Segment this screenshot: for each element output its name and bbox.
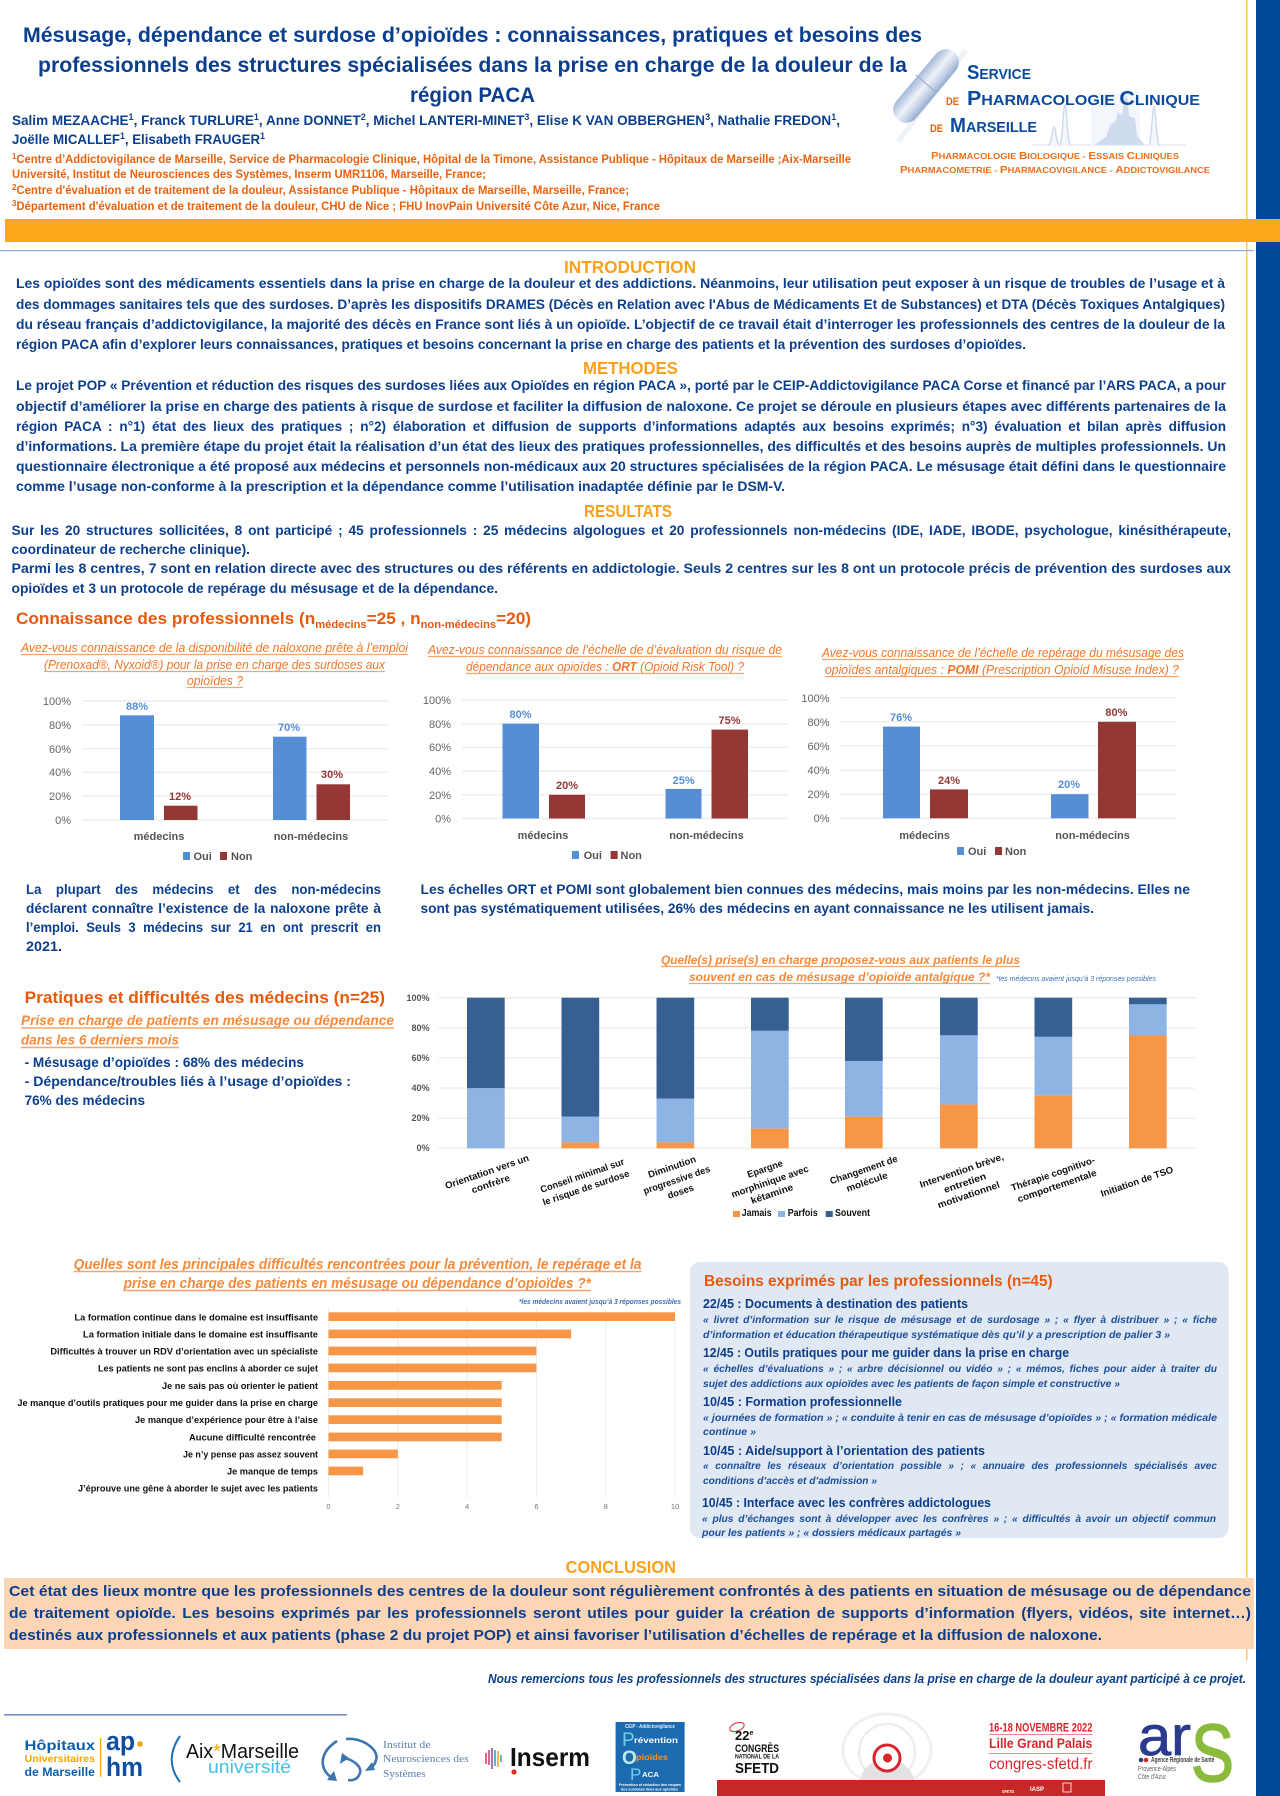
affiliations: Centre d'évaluation et de traitement de la douleur, Assistance Publique - Hôpitaux de Marseille, Marseille, France; xyxy=(16,185,629,197)
logo: projet POP: pioïdes xyxy=(636,1752,668,1762)
chart: POMI knowledge xyxy=(801,646,1184,858)
category labels: Conseil minimal sur xyxy=(539,1157,626,1196)
logo: AP-HM: Hôpitaux xyxy=(24,1738,96,1753)
authors: , Anne DONNET xyxy=(259,113,361,128)
category labels xyxy=(444,1152,1175,1211)
section: introduction: des dommages sanitaires tels que des surdoses. D’après les dispositifs DRAMES (Décès en Relation avec l'Abus de Médicaments Et de Substances) et DTA (Décès Toxiques Antalgiques) xyxy=(16,297,1225,312)
authors: , Franck TURLURE xyxy=(134,113,254,128)
chart: ORT knowledge: 20% xyxy=(429,790,451,802)
category labels: doses xyxy=(666,1183,695,1202)
acknowledgement: Nous remercions tous les professionnels des structures spécialisées dans la prise en charge de la douleur ayant participé à ce projet. xyxy=(488,1672,1246,1686)
logo: Aix-Marseille Universite: université xyxy=(208,1757,291,1777)
category labels: Intervention brève, xyxy=(918,1152,1005,1191)
question 3: Avez-vous connaissance de l’échelle de repérage du mésusage des xyxy=(821,646,1184,660)
authors: 1 xyxy=(129,112,134,122)
category labels: Thérapie cognitivo- xyxy=(1010,1155,1097,1194)
heading: connaissance des professionnels: =20) xyxy=(496,609,531,628)
logo: service de pharmacologie clinique: DE xyxy=(930,123,943,135)
chart: POMI knowledge: non-médecins xyxy=(1055,830,1130,842)
logo: ARS: Provence-Alpes xyxy=(1138,1766,1176,1773)
section: methodes: objectif d’améliorer la prise en charge des patients à risque de surdose et faciliter la diffusion de naloxone. Ce projet se déroule en plusieurs étapes avec différents partenaires de la xyxy=(16,399,1227,414)
logo: Institut de Neurosciences des Systemes xyxy=(323,1739,469,1781)
chart: prises en charge stacked bars: 20% xyxy=(411,1113,430,1123)
chart: naloxone knowledge: 12% xyxy=(169,791,191,803)
authors: Salim MEZAACHE xyxy=(12,113,128,128)
logo: projet POP: des surdoses liées aux opioïdes xyxy=(621,1786,679,1792)
legend: Jamais xyxy=(742,1208,772,1219)
chart: difficultes rencontrees: 10 xyxy=(671,1502,679,1511)
logo: projet POP: CEIP - Addictovigilance xyxy=(625,1724,675,1730)
chart: ORT knowledge: 20% xyxy=(556,780,578,792)
chart: naloxone knowledge: 20% xyxy=(49,791,71,803)
chart: prises en charge stacked bars: 40% xyxy=(411,1083,430,1093)
category labels: morphinique avec xyxy=(730,1164,810,1201)
need: outils: 12/45 : Outils pratiques pour me guider dans la prise en charge xyxy=(703,1346,1069,1360)
question 2: Avez-vous connaissance de l’échelle de d’évaluation du risque de xyxy=(427,643,782,657)
section: resultats: opioïdes et 3 un protocole de repérage du mésusage et de la dépendance. xyxy=(12,581,498,596)
chart: POMI knowledge: 20% xyxy=(1058,779,1080,791)
logo: congres SFETD: congres-sfetd.fr xyxy=(989,1756,1092,1773)
category labels: Diminution xyxy=(647,1154,698,1181)
category labels: molécule xyxy=(845,1170,889,1195)
chart: naloxone knowledge: 70% xyxy=(278,722,300,734)
need: orientation: 10/45 : Aide/support à l’orientation des patients xyxy=(703,1444,985,1458)
chart: naloxone knowledge: médecins xyxy=(134,831,184,843)
question 5: Quelles sont les principales difficultés rencontrées pour la prévention, le repérage et la xyxy=(74,1257,642,1273)
logo: congres SFETD: 16-18 NOVEMBRE 2022 xyxy=(989,1722,1092,1734)
section: introduction: Les opioïdes sont des médicaments essentiels dans la prise en charge de la douleur et des addictions. Néanmoins, leur utilisation peut exposer à un risque de troubles de l’usage et à xyxy=(16,276,1226,291)
category labels: Changement de xyxy=(829,1154,899,1187)
panel: besoins exprimes xyxy=(690,1262,1229,1539)
authors: 1 xyxy=(260,131,265,141)
authors: 3 xyxy=(705,112,710,122)
section: conclusion: destinés aux professionnels et aux patients (phase 2 du projet POP) et ainsi favoriser l’utilisation d’échelles de repérage et la diffusion de naloxone. xyxy=(9,1627,1102,1644)
question 2 xyxy=(427,643,782,674)
need: outils: sujet des addictions aux opioïdes avec les patients de façon simple et constructive » xyxy=(703,1378,1120,1390)
heading: connaissance des professionnels: non-médecins xyxy=(421,619,496,631)
title: Mésusage, dépendance et surdose d’opioïdes : connaissances, pratiques et besoins des xyxy=(23,23,922,47)
text block: naloxone comment xyxy=(26,882,381,954)
logo: congres SFETD: Lille Grand Palais xyxy=(989,1736,1092,1751)
logo: service de pharmacologie clinique: PHARMACOLOGIE CLINIQUE xyxy=(967,88,1200,110)
question 5 xyxy=(74,1257,642,1292)
question 1 xyxy=(20,641,409,688)
chart: naloxone knowledge: non-médecins xyxy=(274,831,348,843)
subheading: prise en charge: dans les 6 derniers mois xyxy=(21,1032,179,1048)
category labels: entretien xyxy=(943,1171,988,1196)
chart: naloxone knowledge: 60% xyxy=(49,744,71,756)
category labels: Je manque de temps xyxy=(227,1466,318,1478)
authors: 3 xyxy=(524,112,529,122)
affiliations: 2 xyxy=(12,183,17,192)
logo: projet POP: Prévention et réduction des risques xyxy=(619,1782,682,1787)
authors: 2 xyxy=(361,112,366,122)
logo: congres SFETD: 22 xyxy=(735,1728,749,1743)
chart: difficultes rencontrees: 4 xyxy=(465,1502,469,1511)
chart: naloxone knowledge: Non xyxy=(231,851,253,863)
section: conclusion xyxy=(4,1557,1254,1649)
need: outils: « échelles d’évaluations » ; « arbre décisionnel ou vidéo » ; « mémos, fiches pour aider à traiter du xyxy=(703,1363,1218,1375)
chart: prises en charge stacked bars: 60% xyxy=(411,1053,430,1063)
section: conclusion: CONCLUSION xyxy=(566,1557,676,1577)
need: interface: « plus d’échanges sont à développer avec les confrères » ; « difficultés à avoir un objectif commun xyxy=(702,1513,1216,1525)
chart: naloxone knowledge: 88% xyxy=(126,701,148,713)
logo: service de pharmacologie clinique: MARSEILLE xyxy=(950,115,1037,137)
question 1: Avez-vous connaissance de la disponibilité de naloxone prête à l’emploi xyxy=(20,641,409,655)
question 1: opioïdes ? xyxy=(187,674,243,688)
section: methodes: questionnaire électronique a été proposé aux médecins et personnels non-médicaux aux 20 structures spécialisées de la région PACA. Le mésusage était défini dans le questionnaire xyxy=(16,459,1226,474)
figures: misuse and dependence xyxy=(25,1055,351,1108)
logo: AP-HM: ap xyxy=(106,1726,135,1756)
section: methodes xyxy=(16,358,1227,494)
chart: POMI knowledge: 60% xyxy=(807,741,830,753)
text block: naloxone comment: 2021. xyxy=(26,939,62,954)
authors: , Nathalie FREDON xyxy=(710,113,831,128)
need: outils xyxy=(703,1346,1218,1390)
logo: congres SFETD xyxy=(717,1714,1105,1796)
logo: service de pharmacologie clinique: PHARMACOMETRIE - PHARMACOVIGILANCE - ADDICTOVIGILANCE xyxy=(900,164,1210,176)
logo: AP-HM: de Marseille xyxy=(24,1767,95,1779)
authors: , Michel LANTERI-MINET xyxy=(366,113,525,128)
logo: ARS: Côte d'Azur xyxy=(1138,1774,1167,1781)
orange header bar xyxy=(5,219,1280,242)
figures: misuse and dependence: 76% des médecins xyxy=(25,1093,145,1108)
need: interface: pour les patients » ; « dossiers médicaux partagés » xyxy=(701,1527,961,1539)
section: methodes: METHODES xyxy=(583,358,678,378)
logo: AP-HM: Universitaires xyxy=(24,1754,95,1765)
logo: congres SFETD: e xyxy=(749,1730,753,1737)
chart: ORT knowledge: 100% xyxy=(423,695,451,707)
category labels: Epargne xyxy=(746,1158,784,1181)
heading: connaissance des professionnels: =25 , n xyxy=(367,609,421,628)
logo: projet POP: révention xyxy=(634,1735,678,1745)
text block: ORT and POMI comment: Les échelles ORT et POMI sont globalement bien connues des médecins, mais moins par les non-médecins. Elles ne xyxy=(420,882,1191,897)
category labels: kétamine xyxy=(750,1182,795,1207)
need: formation: continue » xyxy=(703,1426,756,1438)
chart: ORT knowledge: 75% xyxy=(718,715,741,727)
legend: Parfois xyxy=(788,1208,818,1219)
title xyxy=(23,23,922,107)
chart: ORT knowledge: 40% xyxy=(429,766,451,778)
category labels: Je manque d’outils pratiques pour me guider dans la prise en charge xyxy=(17,1398,318,1409)
logo: service de pharmacologie clinique: DE xyxy=(946,96,959,108)
chart: POMI knowledge: 40% xyxy=(807,765,830,777)
question 4 xyxy=(661,953,1020,984)
section: resultats: Sur les 20 structures sollicitées, 8 ont participé ; 45 professionnels : 25 médecins algologues et 20 professionnels non-médecins (IDE, IADE, IBODE, psychologue, kinésithérapeute, xyxy=(12,523,1231,538)
logo: ARS: Agence Régionale de Santé xyxy=(1151,1755,1214,1764)
need: documents: d’information et éducation thérapeutique systématique dès qu’il y a prescription de palier 3 » xyxy=(703,1329,1170,1341)
need: formation xyxy=(703,1395,1217,1438)
logo: projet POP: P xyxy=(630,1765,641,1784)
authors: , Elisabeth FRAUGER xyxy=(125,132,260,147)
logo: Aix-Marseille Universite xyxy=(172,1736,299,1782)
text block: naloxone comment: l’emploi. Seuls 3 médecins sur 21 en ont prescrit en xyxy=(26,920,381,935)
logo: service de pharmacologie clinique: SERVICE xyxy=(967,62,1031,84)
chart: POMI knowledge: Oui xyxy=(968,846,986,858)
logo: congres SFETD: IASP xyxy=(1030,1787,1044,1793)
chart: naloxone knowledge: Oui xyxy=(194,851,212,863)
legend xyxy=(733,1208,871,1219)
logo: service de pharmacologie clinique xyxy=(888,44,1210,176)
category labels: confrère xyxy=(470,1173,512,1196)
section: conclusion: Cet état des lieux montre que les professionnels des centres de la douleur sont régulièrement confrontés à des patients en situation de mésusage ou de dépendance xyxy=(9,1583,1251,1600)
chart: ORT knowledge: médecins xyxy=(518,830,568,842)
right blue band xyxy=(1256,0,1280,1796)
figures: misuse and dependence: - Mésusage d’opioïdes : 68% des médecins xyxy=(25,1055,304,1070)
section: resultats: RESULTATS xyxy=(584,501,672,521)
chart: ORT knowledge: 0% xyxy=(435,814,451,826)
logo: Inserm: Inserm xyxy=(510,1742,590,1772)
figures: misuse and dependence: - Dépendance/troubles liés à l’usage d’opioïdes : xyxy=(25,1074,351,1089)
chart: prises en charge stacked bars xyxy=(406,953,1195,1219)
logo: Institut de Neurosciences des Systemes: Systèmes xyxy=(383,1768,426,1780)
authors: , xyxy=(836,113,840,128)
need: interface xyxy=(701,1496,1216,1539)
category labels: Orientation vers un xyxy=(444,1153,531,1192)
text block: ORT and POMI comment: sont pas systématiquement utilisées, 26% des médecins en ayant connaissance ne les utilisent jamais. xyxy=(420,901,1094,916)
chart: ORT knowledge: 80% xyxy=(429,719,451,731)
category labels: Aucune difficulté rencontrée xyxy=(189,1432,316,1444)
text block: ORT and POMI comment xyxy=(420,882,1191,916)
chart: POMI knowledge: 100% xyxy=(801,693,830,705)
chart: naloxone knowledge: 0% xyxy=(55,815,71,827)
heading: connaissance des professionnels: médecins xyxy=(315,619,367,631)
chart: POMI knowledge: 0% xyxy=(814,813,830,825)
chart: naloxone knowledge: 40% xyxy=(49,767,71,779)
chart: naloxone knowledge: 80% xyxy=(49,720,71,732)
logo: ARS: ar xyxy=(1138,1704,1191,1767)
category labels: Les patients ne sont pas enclins à aborder ce sujet xyxy=(98,1364,319,1374)
affiliations: 3 xyxy=(12,199,17,208)
note: 3 answers: *les médecins avaient jusqu’à 3 réponses possibles xyxy=(996,974,1156,983)
logo: projet POP: ACA xyxy=(642,1770,660,1779)
chart: ORT knowledge: non-médecins xyxy=(669,830,744,842)
section: methodes: Le projet POP « Prévention et réduction des risques des surdoses liées aux Opioïdes en région PACA », porté par le CEIP-Addictovigilance PACA Corse et financé par l’ARS PACA, a pour xyxy=(16,378,1227,393)
category labels: Je manque d’expérience pour être à l’aise xyxy=(135,1415,318,1426)
heading: pratiques: Pratiques et difficultés des médecins (n=25) xyxy=(25,988,385,1007)
chart: POMI knowledge: 80% xyxy=(1105,707,1128,719)
chart: ORT knowledge: 25% xyxy=(673,775,695,787)
question 4: souvent en cas de mésusage d’opioïde antalgique ?* xyxy=(689,970,991,984)
chart: POMI knowledge: médecins xyxy=(899,830,950,842)
title: région PACA xyxy=(410,83,535,107)
section: introduction xyxy=(16,257,1226,352)
text block: naloxone comment: déclarent connaître l’existence de la naloxone prête à xyxy=(26,901,381,916)
section: conclusion: de traitement opioïde. Les besoins exprimés par les professionnels seront utiles pour guider la création de supports d’information (flyers, vidéos, site internet…) xyxy=(9,1605,1251,1622)
section: resultats: Parmi les 8 centres, 7 sont en relation directe avec des structures ou des référents en addictologie. Seuls 2 centres sur les 8 ont un protocole précis de prévention des surdoses aux xyxy=(12,561,1232,576)
affiliations: Centre d’Addictovigilance de Marseille, Service de Pharmacologie Clinique, Hôpital de la Timone, Assistance Publique - Hôpitaux de Marseille ;Aix-Marseille xyxy=(16,154,851,166)
logo: AP-HM xyxy=(24,1726,143,1782)
chart: prises en charge stacked bars: 0% xyxy=(416,1143,430,1153)
chart: POMI knowledge: 76% xyxy=(890,712,912,724)
chart: POMI knowledge: 80% xyxy=(807,717,830,729)
subheading: prise en charge: Prise en charge de patients en mésusage ou dépendance xyxy=(21,1012,394,1028)
chart: naloxone knowledge: 100% xyxy=(43,696,71,708)
section: introduction: région PACA afin d’explorer leurs connaissances, pratiques et besoins concernant la prise en charge des patients et la prévention des surdoses d’opioïdes. xyxy=(16,337,1026,352)
need: orientation: conditions d’accès et d’admission » xyxy=(703,1475,877,1487)
category labels: Initiation de TSO xyxy=(1099,1165,1175,1200)
logo: congres SFETD: SFETD xyxy=(735,1760,779,1777)
chart: difficultes rencontrees: 6 xyxy=(534,1502,538,1511)
thin orange vertical line xyxy=(1246,0,1248,1660)
category labels: progressive des xyxy=(642,1164,712,1197)
legend: Souvent xyxy=(835,1208,871,1219)
section: resultats xyxy=(12,501,1232,596)
subheading: prise en charge xyxy=(21,1012,394,1048)
section: methodes: région PACA : n°1) état des lieux des pratiques ; n°2) élaboration et diffusion de supports d’informations adaptés aux besoins exprimés; n°3) évaluation et bilan après diffusion xyxy=(16,419,1226,434)
need: formation: « journées de formation » ; « conduite à tenir en cas de mésusage d’opioïdes » ; « formation médicale xyxy=(703,1412,1217,1424)
authors: Joëlle MICALLEF xyxy=(12,132,122,147)
authors: , Elise K VAN OBBERGHEN xyxy=(529,113,705,128)
affiliations xyxy=(12,152,851,213)
need: interface: 10/45 : Interface avec les confrères addictologues xyxy=(702,1496,991,1510)
need: formation: 10/45 : Formation professionnelle xyxy=(703,1395,902,1409)
affiliations: 1 xyxy=(12,152,17,161)
heading: connaissance des professionnels: Connaissance des professionnels (n xyxy=(16,609,312,628)
category labels: J’éprouve une gêne à aborder le sujet avec les patients xyxy=(78,1484,318,1494)
panel: pratiques et difficultes xyxy=(21,988,394,1108)
need: orientation xyxy=(703,1444,1217,1487)
section: introduction: du réseau français d’addictovigilance, la majorité des décès en France sont liés à un opioïde. L’objectif de ce travail était d’interroger les professionnels des centres de la douleur de la xyxy=(16,317,1226,332)
section: methodes: comme l’usage non-conforme à la prescription et la dépendance comme l’utilisation inadaptée définie par le DSM-V. xyxy=(16,479,785,494)
logo: Inserm xyxy=(486,1742,590,1775)
chart: ORT knowledge: Non xyxy=(620,850,642,862)
chart: difficultes rencontrees: 2 xyxy=(396,1502,400,1511)
logo: Aix-Marseille Universite: Aix*Marseille xyxy=(186,1741,299,1763)
question 5: prise en charge des patients en mésusage ou dépendance d’opioïdes ?* xyxy=(123,1276,592,1292)
authors: 1 xyxy=(120,131,125,141)
question 4: Quelle(s) prise(s) en charge proposez-vous aux patients le plus xyxy=(661,953,1020,967)
question 3: opioïdes antalgiques : POMI (Prescription Opioid Misuse Index) ? xyxy=(825,663,1179,677)
chart: ORT knowledge xyxy=(423,643,788,862)
category labels: motivationnel xyxy=(936,1180,1001,1211)
note: 3 answers: *les médecins avaient jusqu’à 3 réponses possibles xyxy=(519,1297,681,1306)
chart: ORT knowledge: 80% xyxy=(509,709,532,721)
section: introduction: INTRODUCTION xyxy=(564,257,696,277)
chart: naloxone knowledge xyxy=(20,641,409,863)
authors xyxy=(12,112,840,147)
logo: ARS xyxy=(1138,1704,1234,1796)
chart: difficultes rencontrees: 0 xyxy=(326,1502,331,1511)
category labels: comportementale xyxy=(1016,1168,1098,1205)
category labels: La formation continue dans le domaine est insuffisante xyxy=(74,1312,318,1324)
authors: 1 xyxy=(254,112,259,122)
need: orientation: « connaître les réseaux d’orientation possible » ; « annuaire des professionnels spécialisés avec xyxy=(703,1460,1217,1472)
category labels: Je ne sais pas où orienter le patient xyxy=(162,1381,319,1392)
logo: Institut de Neurosciences des Systemes: Institut de xyxy=(383,1739,431,1751)
chart: POMI knowledge: 20% xyxy=(807,789,830,801)
affiliations: Département d'évaluation et de traitement de la douleur, CHU de Nice ; FHU InovPain Université Côte Azur, Nice, France xyxy=(16,201,660,213)
logo: AP-HM: hm xyxy=(106,1752,143,1782)
section: methodes: d’informations. La première étape du projet était la réalisation d’un état des lieux des pratiques professionnelles, des difficultés et des besoins auprès de multiples professionnels. Un xyxy=(16,439,1226,454)
logo: congres SFETD: CONGRÈS xyxy=(735,1742,779,1755)
logo: congres SFETD: NATIONAL DE LA xyxy=(735,1754,780,1760)
category labels: le risque de surdose xyxy=(541,1168,631,1208)
chart: ORT knowledge: Oui xyxy=(584,850,602,862)
category labels: Difficultés à trouver un RDV d’orientation avec un spécialiste xyxy=(50,1346,318,1358)
chart: naloxone knowledge: 30% xyxy=(321,769,343,781)
title: professionnels des structures spécialisées dans la prise en charge de la douleur de la xyxy=(38,53,908,77)
logo: Institut de Neurosciences des Systemes: Neurosciences des xyxy=(383,1753,469,1765)
affiliations: Université, Institut de Neurosciences des Systèmes, Inserm UMR1106, Marseille, France; xyxy=(12,169,486,181)
heading: besoins: Besoins exprimés par les professionnels (n=45) xyxy=(704,1273,1053,1290)
chart: POMI knowledge: Non xyxy=(1005,846,1027,858)
chart: ORT knowledge: 60% xyxy=(429,742,451,754)
chart: prises en charge stacked bars: 80% xyxy=(411,1023,430,1033)
category labels: La formation initiale dans le domaine est insuffisante xyxy=(83,1330,318,1340)
logo: projet POP xyxy=(616,1722,685,1792)
logo: congres SFETD: SFETD xyxy=(1002,1789,1015,1794)
logo: projet POP: P xyxy=(622,1730,635,1751)
question 3 xyxy=(821,646,1184,677)
chart: prises en charge stacked bars: 100% xyxy=(406,993,430,1003)
need: documents: 22/45 : Documents à destination des patients xyxy=(703,1297,968,1311)
chart: difficultes rencontrees xyxy=(17,1257,681,1511)
logo: projet POP: O xyxy=(622,1748,637,1769)
need: documents: « livret d’information sur le risque de mésusage et de surdosage » ; « flyer à distribuer » ; « fiche xyxy=(703,1314,1217,1326)
section: resultats: coordinateur de recherche clinique). xyxy=(12,542,250,557)
chart: POMI knowledge: 24% xyxy=(938,775,960,787)
text block: naloxone comment: La plupart des médecins et des non-médecins xyxy=(26,882,381,897)
question 1: (Prenoxad®, Nyxoid®) pour la prise en charge des surdoses aux xyxy=(44,658,386,672)
need: documents xyxy=(703,1297,1217,1341)
chart: difficultes rencontrees: 8 xyxy=(604,1502,608,1511)
question 2: dépendance aux opioïdes : ORT (Opioid Risk Tool) ? xyxy=(466,660,744,674)
logo: service de pharmacologie clinique: PHARMACOLOGIE BIOLOGIQUE - ESSAIS CLINIQUES xyxy=(931,150,1179,162)
category labels: Je n’y pense pas assez souvent xyxy=(183,1450,319,1460)
category labels xyxy=(17,1312,319,1494)
authors: 1 xyxy=(831,112,836,122)
